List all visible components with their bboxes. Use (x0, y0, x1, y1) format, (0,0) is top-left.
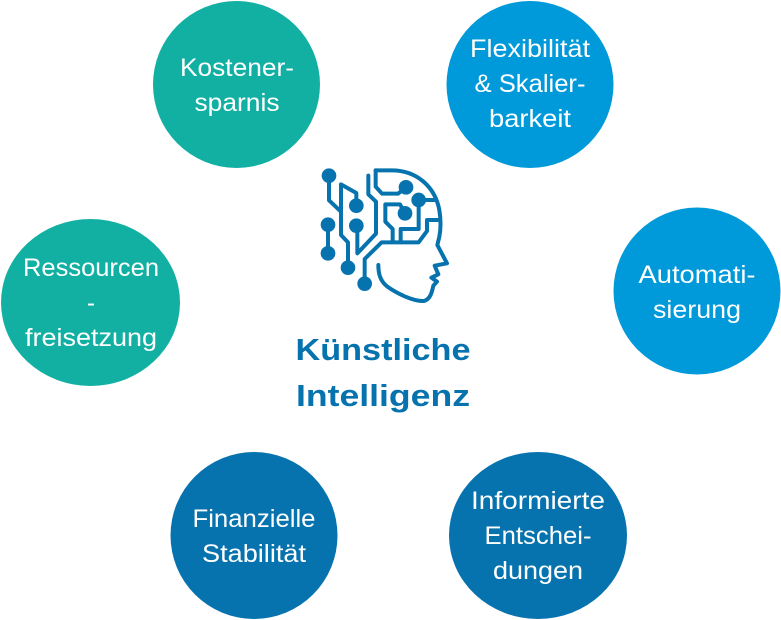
panel: Flexibilität & Skalierbarkeit: barkeit (489, 105, 571, 133)
panel: Automatisierung (614, 208, 780, 374)
panel: Ressourcenfreisetzung: - (87, 289, 95, 317)
panel: Ressourcenfreisetzung (1, 219, 180, 386)
panel: Kostenersparnis (153, 1, 320, 168)
panel: Kostenersparnis: Kostener- (180, 54, 294, 82)
panel: Informierte Entscheidungen: dungen (493, 557, 583, 585)
icon: AI head with circuits (321, 168, 447, 301)
panel: Automatisierung: sierung (653, 296, 741, 324)
panel: Ressourcenfreisetzung: freisetzung (25, 324, 157, 352)
panel: Finanzielle Stabilität (170, 452, 338, 619)
panel: Ressourcenfreisetzung: Ressourcen (23, 254, 159, 282)
title: Intelligenz (296, 378, 470, 413)
panel: Informierte Entscheidungen (449, 452, 627, 619)
panel: Informierte Entscheidungen: Entschei- (484, 522, 592, 550)
title: Künstliche (296, 332, 470, 367)
panel: Kostenersparnis: sparnis (194, 89, 280, 117)
panel: Flexibilität & Skalierbarkeit: Flexibilität (470, 35, 590, 63)
panel: Informierte Entscheidungen: Informierte (471, 487, 605, 515)
panel: Finanzielle Stabilität: Finanzielle (192, 505, 316, 533)
panel: Finanzielle Stabilität: Stabilität (202, 540, 306, 568)
title (296, 332, 470, 413)
panel: Automatisierung: Automati- (638, 261, 756, 289)
panel: Flexibilität & Skalierbarkeit (446, 1, 614, 168)
panel: Flexibilität & Skalierbarkeit: & Skalier- (474, 70, 586, 98)
